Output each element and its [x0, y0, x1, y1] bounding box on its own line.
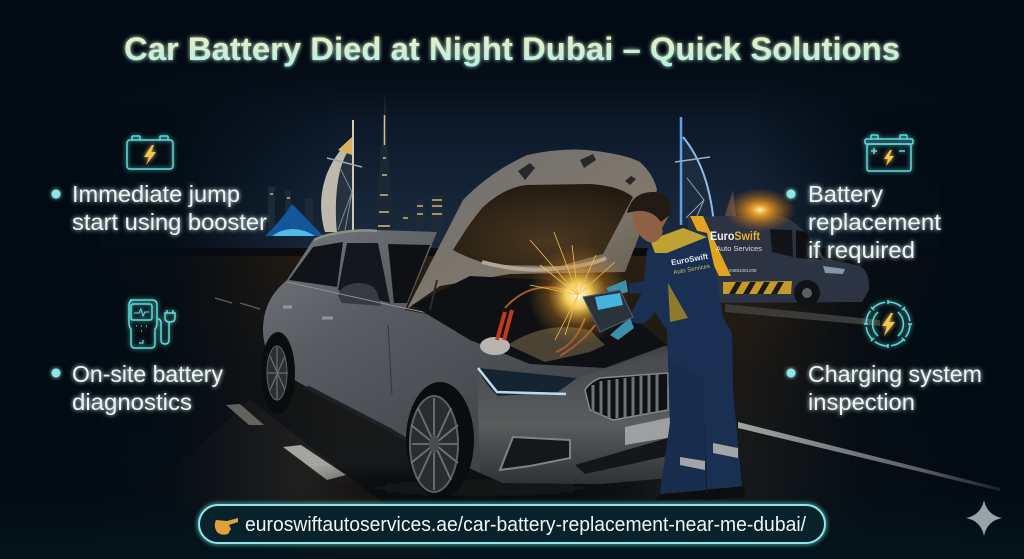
Dubai skyline [265, 93, 737, 236]
icon: charging gauge [864, 300, 912, 348]
rear side window [289, 242, 343, 287]
road markings [215, 298, 1000, 491]
icon: battery with bolt [127, 136, 173, 169]
panel: diagnostics [52, 300, 223, 415]
service van: Auto Services [716, 244, 762, 253]
car rear wheel [261, 332, 295, 414]
bottom fade [0, 490, 1024, 559]
text: charging inspection: Charging system [808, 361, 982, 387]
side mirror [338, 283, 381, 306]
front side window [338, 243, 390, 303]
text: jump start: Immediate jump [72, 181, 240, 207]
bullet [786, 368, 796, 378]
car front wheel [406, 382, 474, 498]
left leg [660, 357, 706, 494]
link text: euroswiftautoservices.ae/car-battery-replacement-near-me-dubai/ [245, 514, 806, 536]
bullet [52, 190, 60, 198]
text: replacement: if required [808, 237, 915, 263]
engine bay with cables and battery tester [412, 276, 667, 368]
text: charging inspection: inspection [808, 389, 915, 415]
mechanic [606, 192, 745, 501]
text: jump start: start using booster [72, 209, 267, 235]
bullet [52, 368, 60, 378]
text: diagnostics: On-site battery [72, 361, 223, 387]
callout: website link pill [199, 505, 825, 543]
panel: jump start [52, 136, 267, 235]
diagnostic tablet [583, 290, 633, 332]
title: Car Battery Died at Night Dubai – Quick Solutions [124, 31, 900, 67]
mechanic: EuroSwift [670, 252, 709, 267]
icon: battery plus minus [865, 135, 913, 171]
car body [263, 230, 677, 484]
icon: handheld tester with plug [129, 300, 175, 348]
front fascia [477, 350, 677, 484]
panel: replacement [786, 135, 941, 263]
text: replacement: Battery [808, 181, 883, 207]
service van: 04651001209 [729, 268, 757, 273]
service van: EuroSwift [710, 229, 760, 243]
icon: sparkle watermark [966, 500, 1002, 536]
panel: charging inspection [786, 300, 982, 415]
sparks [528, 232, 628, 345]
text: replacement: replacement [808, 209, 941, 235]
car shadow [310, 478, 650, 498]
mechanic: Auto Services [673, 264, 711, 276]
text: diagnostics: diagnostics [72, 389, 192, 415]
amber beacon glow [724, 188, 796, 232]
headlight and grille [478, 368, 672, 474]
icon: pointing hand [215, 518, 238, 535]
open hood [407, 150, 657, 309]
bullet [786, 190, 796, 198]
service van [688, 215, 869, 306]
windshield [388, 244, 430, 303]
